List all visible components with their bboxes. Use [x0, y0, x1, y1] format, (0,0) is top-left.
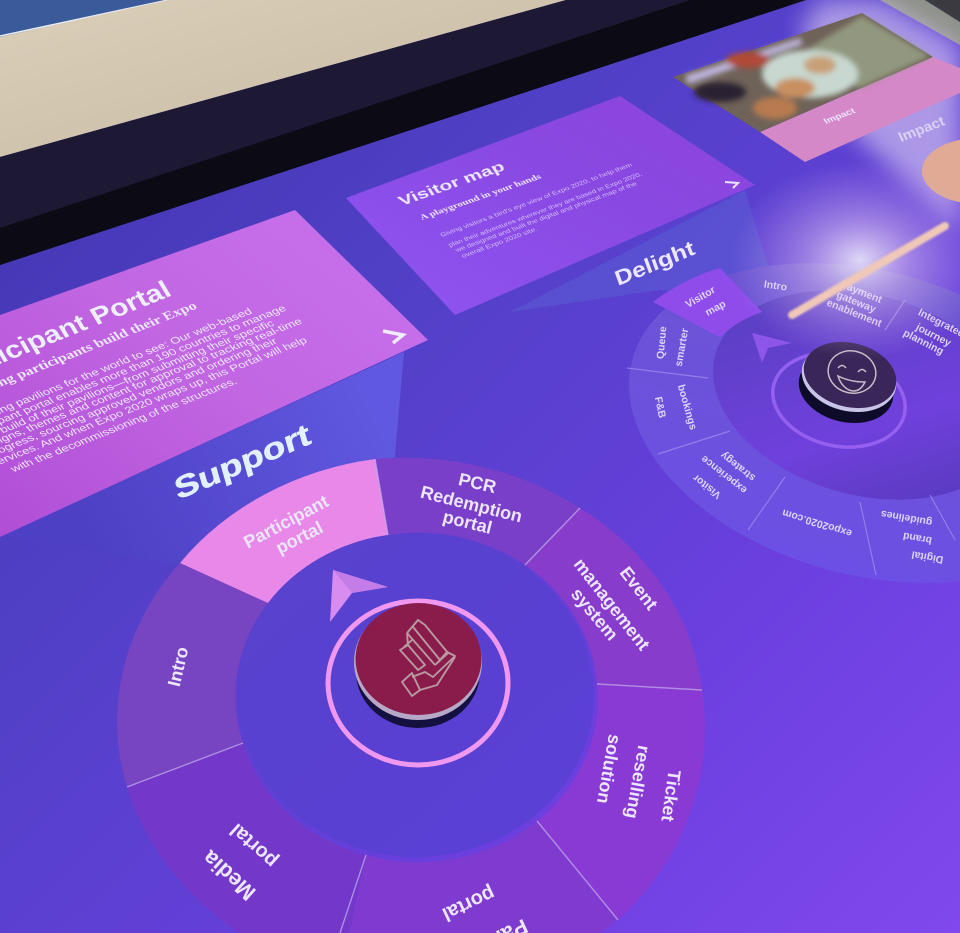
support spokes — [127, 459, 702, 933]
expo2020.com label: expo2020.com — [781, 507, 853, 539]
panel: impact card — [673, 13, 960, 162]
event management system label: management — [570, 554, 654, 654]
light streak and glare — [730, 160, 960, 360]
intro segment — [117, 563, 268, 787]
icon: smiley — [824, 346, 880, 398]
visitor map body text: Giving visitors a bird's eye view of Expo 2020, to help them — [439, 162, 634, 238]
participant portal label: Participant — [240, 491, 332, 552]
label: support heading: Support — [170, 416, 315, 506]
wheel: delight — [593, 213, 960, 633]
pcr redemption portal label — [419, 469, 524, 538]
visitor experience strategy label: experience — [699, 453, 749, 496]
event segment — [525, 508, 702, 690]
payment gateway enablement label: gateway — [835, 289, 878, 316]
media portal label: portal — [226, 819, 282, 872]
visitor experience strategy label — [691, 449, 758, 501]
integrated journey planning label: journey — [913, 321, 953, 349]
visitor map label: map — [703, 298, 728, 319]
integrated journey planning label — [901, 306, 960, 358]
delight inner disc — [689, 258, 960, 532]
payment gateway enablement label — [825, 278, 884, 330]
integrated journey planning label: planning — [901, 327, 946, 358]
digital brand guidelines label: brand — [902, 530, 933, 546]
pcr redemption portal label: PCR — [457, 469, 498, 497]
participant body text: with the decommissioning of the structures. — [8, 377, 240, 475]
visitor experience strategy label: strategy — [718, 449, 758, 484]
visitor map label — [683, 284, 728, 319]
visitor map body text: plan their adventures wherever they are based in Expo 2020, — [447, 172, 644, 248]
partner portal label — [439, 882, 531, 933]
visitor map body text: we designed and built the digital and physical map of the — [453, 181, 639, 254]
f and b bookings label: bookings — [675, 383, 699, 431]
beam to delight wheel — [510, 190, 778, 312]
media segment — [127, 743, 366, 933]
visitor map chevron — [725, 182, 738, 188]
panel: visitor map — [346, 96, 755, 315]
participant chevron — [383, 331, 403, 343]
beam to participant segment — [0, 352, 404, 565]
queue smarter label: Queue — [655, 326, 669, 360]
ticket reselling solution label — [593, 733, 684, 823]
delight ring — [764, 341, 914, 459]
payment gateway enablement label: Payment — [839, 278, 884, 306]
partner segment — [340, 821, 618, 933]
partner portal label: portal — [439, 882, 498, 925]
digital brand guidelines label: guidelines — [880, 508, 933, 528]
event management system label: system — [567, 584, 622, 644]
queue smarter label: smarter — [673, 327, 691, 367]
visitor map highlighted segment — [653, 268, 762, 337]
light wash top right — [800, 0, 960, 230]
ticket reselling solution label: reselling — [622, 744, 654, 820]
f and b bookings label: F&B — [652, 396, 668, 420]
label: delight heading: Delight — [612, 236, 698, 290]
label: impact heading: Impact — [896, 114, 948, 146]
pcr segment — [375, 458, 580, 565]
payment gateway enablement label: enablement — [825, 297, 884, 330]
digital brand guidelines label: Digital — [911, 548, 944, 566]
media portal label: Media — [197, 845, 261, 906]
support puck with icon — [354, 603, 482, 728]
intro label: Intro — [164, 645, 192, 688]
wheel: support — [117, 458, 705, 933]
digital brand guidelines label — [880, 508, 944, 566]
inner disc — [238, 533, 594, 857]
impact photo — [673, 13, 933, 132]
ticket reselling solution label: solution — [593, 733, 625, 805]
support ring — [328, 601, 508, 765]
participant highlighted segment — [180, 459, 388, 603]
support selector arrow — [330, 570, 388, 622]
impact pink caption band — [760, 57, 960, 162]
intro label: Intro — [763, 278, 788, 294]
delight spokes — [627, 300, 955, 575]
f and b bookings label — [652, 383, 699, 431]
event management system label: Event — [616, 563, 662, 614]
queue smarter label — [655, 326, 691, 367]
ticket reselling solution label: Ticket — [657, 769, 684, 823]
visitor map body text: overall Expo 2020 site. — [460, 226, 539, 259]
delight selector arrow — [752, 333, 792, 363]
wall and monitor behind the table — [0, 0, 960, 265]
pcr redemption portal label: portal — [441, 506, 494, 538]
visitor map title: Visitor map — [395, 159, 508, 209]
visitor experience strategy label: Visitor — [691, 472, 724, 501]
visitor map card background — [346, 96, 755, 315]
peach segment of impact wheel — [922, 138, 960, 204]
visitor map subtitle: A playground in your hands — [418, 172, 544, 221]
participant portal label: portal — [272, 517, 326, 558]
pcr redemption portal label: Redemption — [419, 482, 524, 526]
media portal label — [197, 819, 282, 906]
ticket segment — [537, 684, 705, 920]
visitor map label: Visitor — [683, 284, 718, 311]
participant card background — [0, 210, 428, 537]
delight puck with smiley — [791, 333, 904, 433]
panel: participant portal — [0, 210, 428, 537]
icon: hand holding buildings — [400, 620, 455, 696]
delight outer ring — [593, 213, 960, 633]
impact caption text: Impact — [822, 106, 857, 126]
